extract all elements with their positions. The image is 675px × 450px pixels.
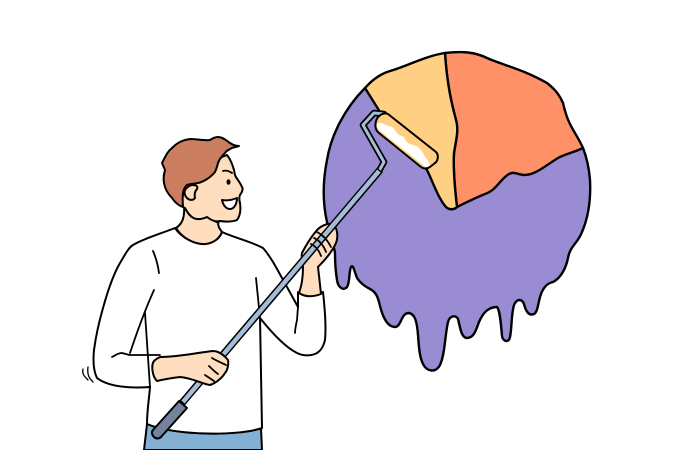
chin shadow: [207, 216, 220, 224]
eyebrow: [223, 171, 232, 173]
roller handle frame: [363, 113, 384, 171]
pie chart paint blob: [324, 52, 590, 371]
neck: [176, 205, 222, 244]
hair: [162, 137, 239, 207]
sweater fold lines: [112, 251, 298, 387]
head and face: [182, 155, 243, 222]
roller white highlight: [377, 123, 430, 167]
finger lines: [205, 358, 226, 381]
pole grip: [152, 401, 187, 438]
roller sleeve: [375, 113, 438, 168]
right hand fingers: [311, 232, 331, 256]
orange segment: [445, 52, 583, 207]
motion lines: [83, 367, 93, 382]
eye: [226, 179, 230, 185]
sweater torso and sleeves: [93, 228, 325, 434]
left hand gripping pole: [152, 351, 228, 385]
man: [83, 137, 337, 450]
ear: [185, 185, 197, 200]
jeans: [144, 424, 262, 450]
roller pole: [182, 170, 380, 403]
paint roller: [152, 113, 438, 438]
yellow segment: [365, 53, 457, 209]
mouth: [222, 198, 237, 209]
purple segment with drips: [324, 53, 590, 371]
right forearm and hand: [299, 224, 337, 296]
